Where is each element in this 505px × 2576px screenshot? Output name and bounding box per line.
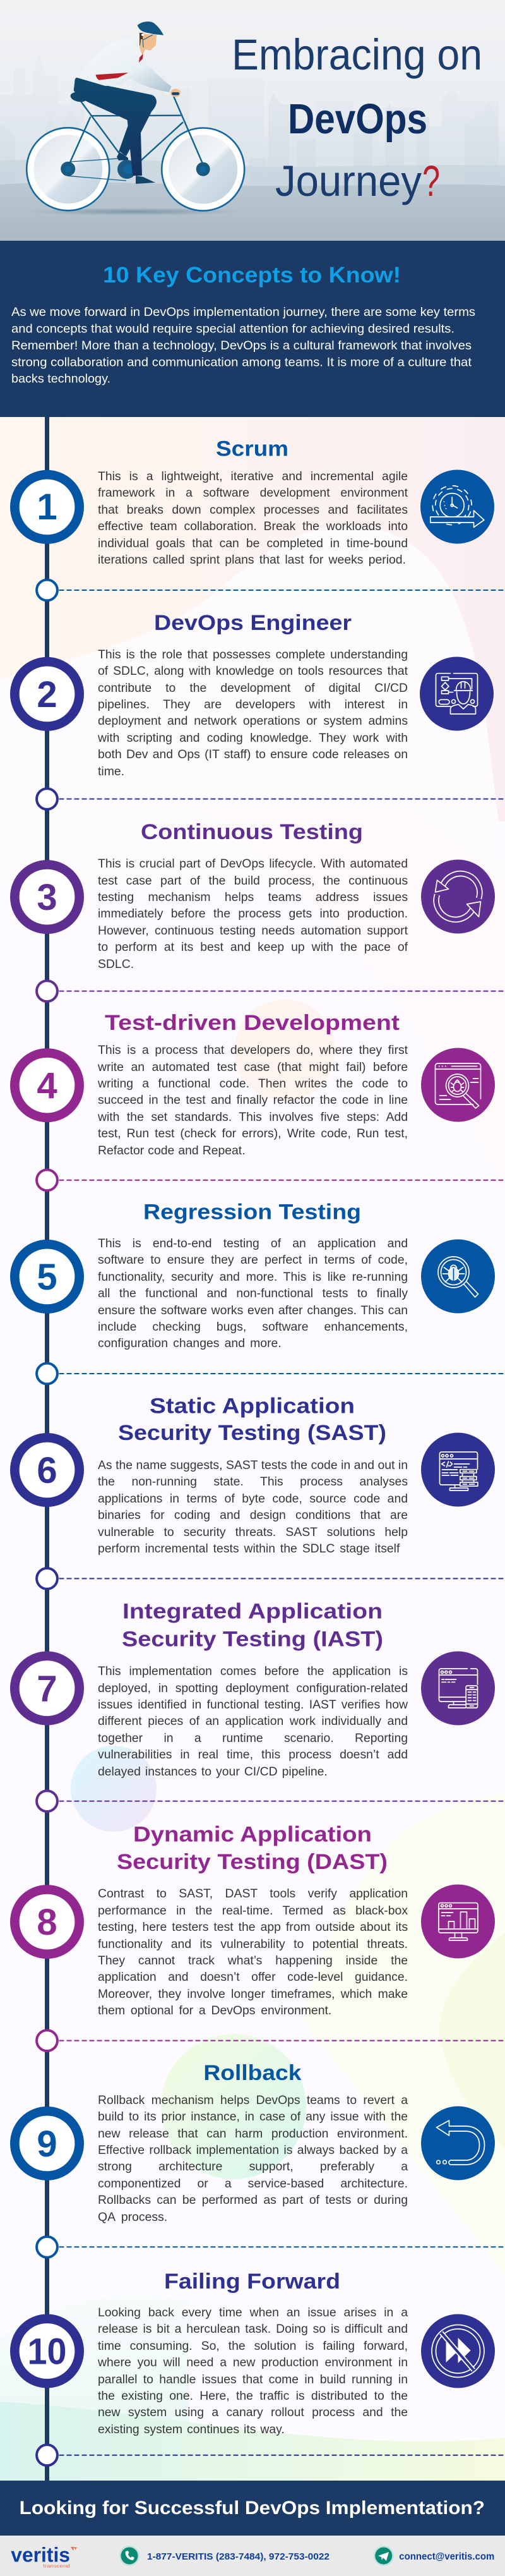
body text: deployment and network operations or system admins [98, 715, 408, 728]
title [232, 30, 482, 205]
body text: As the name suggests, SAST tests the code in and out in [98, 1459, 408, 1472]
body text: of SDLC, along with knowledge on tools resources that [98, 665, 408, 678]
call to action banner [0, 2481, 505, 2536]
body text: include checking bugs, software enhancements, [98, 1321, 408, 1334]
saddle [69, 91, 88, 103]
icon: browser with bug magnifier [421, 1048, 495, 1122]
title: Embracing on [232, 30, 482, 79]
node and divider [37, 1791, 505, 1811]
heading: DevOps Engineer [154, 611, 352, 635]
body text: functionality, security and more. This is like re-running [98, 1271, 408, 1284]
body text: release is bit a herculean task. Doing so is difficult and [98, 2323, 408, 2336]
body text: with the set standards. This involves five steps: Add [98, 1111, 408, 1124]
footer bar [0, 2536, 505, 2576]
number badge: 2 [37, 674, 57, 715]
body text: them optional for a DevOps environment. [98, 2004, 331, 2017]
icon: monitor and phone [421, 1652, 495, 1725]
panel: intro [0, 241, 505, 417]
body text: This is end-to-end testing of an application and [98, 1237, 408, 1250]
heading: Dynamic Application [133, 1822, 372, 1846]
number badge: 6 [37, 1450, 57, 1491]
icon: sync arrows [421, 859, 495, 934]
body text: all the functional and non-functional tests to finally [98, 1287, 408, 1300]
node and divider [37, 981, 505, 1001]
body text: immediately before the process gets into production. [98, 907, 408, 921]
number badge: 3 [37, 877, 57, 918]
trousers [74, 78, 157, 176]
body text: contribute to the development of digital CI/CD [98, 681, 408, 695]
body text [98, 1886, 410, 2024]
wheel hubs and crank [61, 160, 210, 179]
body text: with scripting and coding knowledge. They work with [98, 732, 408, 745]
icon: engineer with flowchart board [420, 657, 494, 730]
number badge [15, 1437, 80, 1503]
body text: However, continuous testing needs automation support [98, 924, 408, 938]
number badge [15, 1053, 80, 1118]
front shoe [136, 176, 155, 184]
intro paragraph: backs technology. [11, 372, 110, 385]
panel: 9 Rollback [15, 2061, 505, 2258]
body text [98, 647, 410, 785]
body text [98, 1664, 410, 1784]
body text: SDLC. [98, 958, 134, 971]
title: DevOps [288, 95, 427, 143]
body text: ensure the software works even after changes. This can [98, 1304, 408, 1317]
heading: Security Testing (DAST) [117, 1850, 388, 1874]
number badge [15, 1244, 80, 1309]
body text: new system using a canary rollout process and the [98, 2406, 408, 2419]
number badge [15, 1656, 80, 1720]
email address: connect@veritis.com [399, 2551, 494, 2562]
heading: Security Testing (SAST) [118, 1421, 386, 1445]
icon: monitor with code [421, 1433, 495, 1506]
panel: 2 DevOps Engineer [15, 611, 505, 809]
body text: the non-running state. This process analyses [98, 1475, 408, 1489]
panel: 4 Test-driven Development [15, 1011, 505, 1190]
body text: build to its prior instance, in case of any issue with the [98, 2110, 408, 2124]
node and divider [37, 1364, 505, 1384]
title: Journey [275, 157, 422, 205]
panel: 5 Regression Testing [15, 1200, 505, 1384]
body text: together in a runtime scenario. Reporting [98, 1732, 408, 1745]
icon: phone [119, 2546, 140, 2566]
body text: test, Run test (check for errors), Write code, Run test, [98, 1127, 408, 1140]
heading: 10 key concepts: 10 Key Concepts to Know! [103, 263, 401, 287]
body text: vulnerable to security threats. SAST solutions help [98, 1526, 408, 1539]
number badge [15, 662, 80, 727]
body text: individual goals that can be completed in time-bound [98, 537, 408, 550]
body text: effective team collaboration. Break the workloads into [98, 520, 408, 533]
body text: both Dev and Ops (IT staff) to ensure code releases on [98, 748, 408, 761]
body text [98, 1458, 410, 1562]
body text: framework in a software development environment [98, 487, 408, 500]
body text: where you will need a new production environment in [98, 2356, 408, 2369]
body text: time consuming. So, the solution is failing forward, [98, 2340, 408, 2353]
number badge: 5 [37, 1257, 57, 1298]
body text [98, 2093, 410, 2230]
rear leg [117, 125, 140, 160]
head [140, 33, 157, 55]
number badge [15, 864, 80, 929]
body text: the existing one. Here, the traffic is distributed to the [98, 2390, 408, 2403]
heading: Regression Testing [143, 1200, 361, 1225]
panel: 8 DAST [15, 1822, 505, 2051]
body text: perform incremental tests within the SDLC stage itself [98, 1542, 400, 1556]
heading: Continuous Testing [141, 820, 363, 844]
body text: Looking back every time when an issue arises in a [98, 2306, 408, 2319]
node and divider [37, 2030, 505, 2051]
number badge: 9 [37, 2124, 57, 2165]
timeline [45, 417, 49, 2481]
icon: fast-forward prohibited [421, 2314, 495, 2388]
node and divider [37, 1170, 505, 1190]
body text: pipelines. They are developers with interest in [98, 698, 408, 711]
number badge [15, 2319, 80, 2383]
body text: issues identified in functional testing. IAST verifies how [98, 1698, 408, 1712]
body text: This is a process that developers do, where they first [98, 1044, 408, 1057]
body text: Moreover, they involve longer timeframes, which make [98, 1988, 408, 2001]
body text: binaries for coding and design conditions that are [98, 1509, 408, 1522]
rear wheel [27, 128, 109, 210]
body text: Effective rollback implementation is always backed by a [98, 2144, 408, 2157]
body text: existing system continues its way. [98, 2423, 285, 2436]
logo: veritis: veritis [11, 2543, 70, 2566]
number badge: 10 [28, 2331, 67, 2372]
number badge: 7 [37, 1668, 57, 1710]
heading: Scrum [216, 437, 288, 461]
number badge [15, 2111, 80, 2176]
body text [98, 469, 410, 573]
intro paragraph: strong collaboration and communication among teams. It is more of a culture that [11, 355, 472, 369]
body text: This is the role that possesses complete understanding [98, 648, 408, 662]
body text: deployed, in spotting deployment configuration-related [98, 1682, 408, 1695]
bike frame [68, 94, 203, 181]
icon: gear clock and arrow [420, 470, 494, 543]
panel: 6 SAST [15, 1394, 505, 1589]
body text: testing mechanism helps teams address issues [98, 891, 408, 904]
body text [98, 856, 410, 976]
heading [117, 1822, 388, 1874]
body text: vulnerabilities in real time, this process doesn’t add [98, 1748, 408, 1762]
heading: Rollback [203, 2061, 301, 2085]
body text: strong architecture support, preferably a [98, 2160, 408, 2174]
body text: This implementation comes before the application is [98, 1665, 408, 1678]
body text: They cannot track what’s happening inside the [98, 1954, 408, 1968]
body text: write an automated test case (that might fail) before [98, 1061, 408, 1074]
body text: new release that can harm production environment. [98, 2127, 408, 2141]
body text: delayed instances to your CI/CD pipeline. [98, 1765, 328, 1779]
node and divider [37, 580, 505, 600]
icon: paper plane [374, 2546, 394, 2566]
helmet [138, 21, 163, 35]
body text: time. [98, 765, 124, 778]
body text: functionality and its vulnerability to potential threats. [98, 1938, 408, 1951]
node and divider [37, 1568, 505, 1589]
body text: test case part of the build process, the continuous [98, 874, 408, 887]
heading: Failing Forward [164, 2270, 340, 2294]
body text [98, 1236, 410, 1356]
body text: application and doesn’t offer code-level guidance. [98, 1971, 408, 1984]
necktie [96, 54, 143, 80]
body text: writing a functional code. Then writes the code to [98, 1077, 408, 1091]
icon: bug under magnifier [421, 1240, 495, 1313]
node and divider [37, 789, 505, 809]
panel: 1 Scrum [15, 437, 505, 600]
heading: Integrated Application [122, 1600, 383, 1624]
intro paragraph: and concepts that would require special attention for achieving desired results. [11, 322, 454, 336]
icon: U-turn back arrow [421, 2107, 495, 2180]
call to action banner: Looking for Successful DevOps Implementation? [20, 2498, 485, 2519]
number badge: 1 [37, 487, 57, 528]
intro paragraph: Remember! More than a technology, DevOps is a cultural framework that involves [11, 339, 472, 353]
number badge [15, 475, 80, 540]
body text: Contrast to SAST, DAST tools verify application [98, 1887, 408, 1901]
body text [98, 1043, 410, 1163]
illustration: businessman cycling [27, 21, 244, 211]
shirt [77, 39, 172, 92]
phone numbers: 1-877-VERITIS (283-7484), 972-753-0022 [147, 2551, 330, 2562]
heading [118, 1394, 386, 1445]
heading [122, 1600, 383, 1652]
body text: software to ensure they are perfect in terms of code, [98, 1254, 408, 1267]
heading: Test-driven Development [105, 1011, 400, 1035]
number badge: 4 [37, 1065, 57, 1106]
body text: different pieces of an application work individually and [98, 1715, 408, 1728]
body text: Rollbacks can be performed as part of tests or during [98, 2194, 408, 2207]
body text: iterations called sprint plans that last for weeks period. [98, 553, 406, 567]
body text: parallel to handle issues that come in build running in [98, 2373, 408, 2386]
intro paragraph: As we move forward in DevOps implementation journey, there are some key terms [11, 305, 475, 319]
body text: This is crucial part of DevOps lifecycle. With automated [98, 857, 408, 871]
body text: QA process. [98, 2211, 167, 2224]
header banner [0, 0, 505, 241]
heading: Security Testing (IAST) [122, 1628, 383, 1652]
body text: configuration changes and more. [98, 1337, 282, 1350]
body text: Refactor code and Repeat. [98, 1144, 246, 1158]
title: ? [422, 157, 440, 205]
body text: succeed in the test and finally refactor the code in line [98, 1094, 408, 1107]
intro paragraph [11, 305, 475, 385]
body text: to perform at its best and keep up with the pace of [98, 941, 408, 954]
node and divider [37, 2237, 505, 2258]
panel: 10 Failing Forward [15, 2270, 505, 2465]
number badge [15, 1889, 80, 1954]
front wheel [162, 128, 244, 211]
panel: 3 Continuous Testing [15, 820, 505, 1001]
logo: veritis: transcend [43, 2563, 70, 2568]
body text: This is a lightweight, iterative and incremental agile [98, 470, 408, 483]
number badge: 8 [37, 1902, 57, 1943]
body text [98, 2305, 410, 2443]
heading: Static Application [150, 1394, 355, 1418]
body text: that breaks down complex processes and facilitates [98, 504, 408, 517]
body text: componentized or a service-based architecture. [98, 2177, 408, 2191]
node and divider [37, 2445, 505, 2465]
body text: Rollback mechanism helps DevOps teams to revert a [98, 2094, 408, 2107]
body text: testing, here testers test the app from outside about its [98, 1921, 408, 1934]
body text: performance in the real-time. Termed as black-box [98, 1904, 408, 1918]
panel: 7 IAST [15, 1600, 505, 1811]
icon: monitor with bar chart [421, 1884, 495, 1959]
city skyline [0, 51, 499, 190]
hand and handlebar [170, 88, 181, 97]
body text: applications in terms of byte code, source code and [98, 1492, 408, 1506]
